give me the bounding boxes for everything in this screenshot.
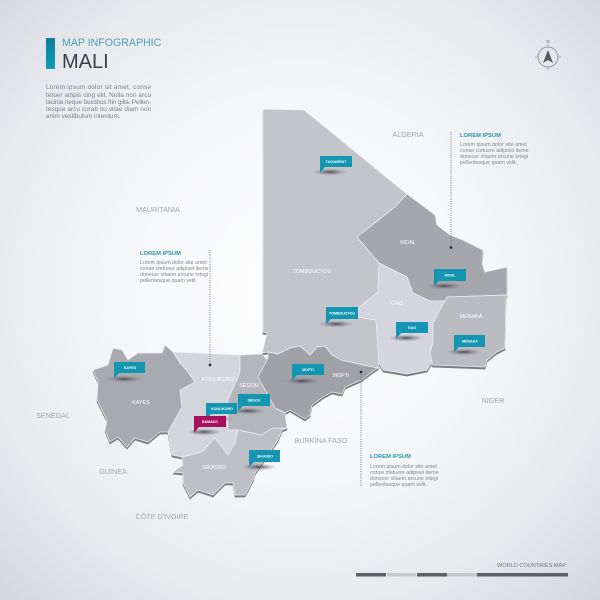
marker: Ségou: SÉGOU [248, 398, 261, 402]
header accent bar [46, 38, 55, 69]
country labels: BURKINA FASO [295, 436, 348, 445]
country labels [36, 130, 504, 521]
marker: Sikasso [241, 450, 280, 470]
region labels: MÉNAKA [460, 313, 483, 320]
title: MALI [62, 51, 109, 73]
marker: Bamako: BAMAKO [202, 420, 218, 424]
region labels [132, 240, 483, 471]
region labels: KIDAL [400, 240, 416, 246]
footer label: WORLD COUNTRIES MAP [497, 563, 566, 569]
intro text: Lorem ipsum dolor sit amet, conse [46, 84, 151, 91]
icon: compass: N [546, 39, 550, 44]
icon: compass [535, 39, 561, 70]
marker: Taoudénit [312, 156, 352, 176]
callout: left: LOREM IPSUM [140, 251, 181, 257]
region labels: MOPTI [332, 373, 350, 379]
callout: left [140, 250, 211, 366]
region: Kidal [357, 194, 507, 301]
marker: Mopti: MOPTI [302, 368, 314, 372]
callout: left: Lorem ipsum dolor site amet [140, 260, 207, 266]
callout: top right [450, 132, 529, 249]
map of Mali [93, 109, 507, 497]
country labels: MAURITANIA [136, 205, 180, 214]
callout: top right: conse ctetuere adipisel iteme [460, 148, 529, 154]
region labels: KOULIKORO [202, 377, 234, 383]
region: Mopti [258, 346, 378, 419]
callout: left: donecer vitaem arcune integi [140, 272, 208, 278]
callout: bottom: LOREM IPSUM [370, 454, 411, 460]
region: Sikasso [173, 428, 287, 497]
callout: top right: LOREM IPSUM [460, 133, 501, 139]
region labels: GAO [391, 301, 403, 307]
marker: Kayes: KAYES [124, 366, 137, 370]
region: Koulikoro [168, 352, 240, 457]
intro text [46, 84, 151, 120]
region: Ménaka [430, 295, 507, 367]
callout: top right: pellentesque quam velit. [460, 160, 517, 166]
subtitle: MAP INFOGRAPHIC [62, 37, 162, 49]
callout: left: conse ctetuere adipisel iteme [140, 266, 209, 272]
callout: bottom: Lorem ipsum dolor site amet [370, 464, 437, 470]
marker: Koulikoro [198, 403, 237, 422]
marker: Kidal: KIDAL [445, 274, 456, 278]
intro text: tetuer adipis cing elit. Nulla non arcu [46, 92, 151, 99]
region: Kayes [93, 345, 195, 447]
callout: bottom: donecer vitaem arcune integi [370, 476, 438, 482]
country labels: CÔTE D'IVOIRE [136, 512, 189, 521]
region: Gao [358, 263, 445, 374]
intro text: enim vestibulum interdum. [46, 113, 121, 120]
marker: Bamako [186, 416, 226, 436]
callout: bottom [360, 371, 439, 488]
country labels: GUINEA [99, 467, 127, 476]
callout: top right: Lorem ipsum dolor site amet [460, 142, 527, 148]
marker: Ménaka: MÉNAKA [462, 338, 478, 344]
region: Ségou [228, 354, 287, 435]
marker: Tombouctou: TOMBOUCTOU [329, 312, 355, 316]
marker: Tombouctou [318, 307, 358, 328]
marker: Kidal [426, 269, 466, 290]
country labels: ALGERIA [392, 130, 424, 139]
country labels: NIGER [482, 396, 504, 405]
intro text: tesque arcu curab itu vitae diam non [46, 106, 151, 113]
marker: Gao: GAO [408, 326, 416, 330]
callout: left: pellentesque quam velit. [140, 278, 197, 284]
marker: Ménaka [446, 335, 485, 356]
callout: top right: donecer vitaem arcune integi [460, 154, 528, 160]
intro text: lacinia neque faucibus frin gilla. Pellen- [46, 99, 151, 106]
region labels: SIKASSO [202, 465, 226, 471]
marker: Gao [388, 322, 428, 342]
marker: Ségou [230, 394, 270, 414]
marker: Koulikoro: KOULIKORO [211, 407, 233, 411]
region labels: TOMBOUCTOU [293, 269, 331, 275]
callout: bottom: pellentesque quam velit. [370, 482, 427, 488]
callout: bottom: conse ctetuere adipisel iteme [370, 470, 439, 476]
region: Tombouctou [262, 109, 407, 368]
country labels: SENEGAL [36, 411, 70, 420]
marker: Sikasso: SIKASSO [257, 454, 273, 458]
footer scale bar [356, 573, 568, 576]
marker: Kayes [106, 362, 145, 382]
marker: Mopti [284, 364, 324, 384]
marker: Taoudénit: TAOUDÉNIT [326, 159, 347, 164]
region labels: KAYES [132, 400, 150, 406]
region labels: SÉGOU [239, 382, 259, 389]
